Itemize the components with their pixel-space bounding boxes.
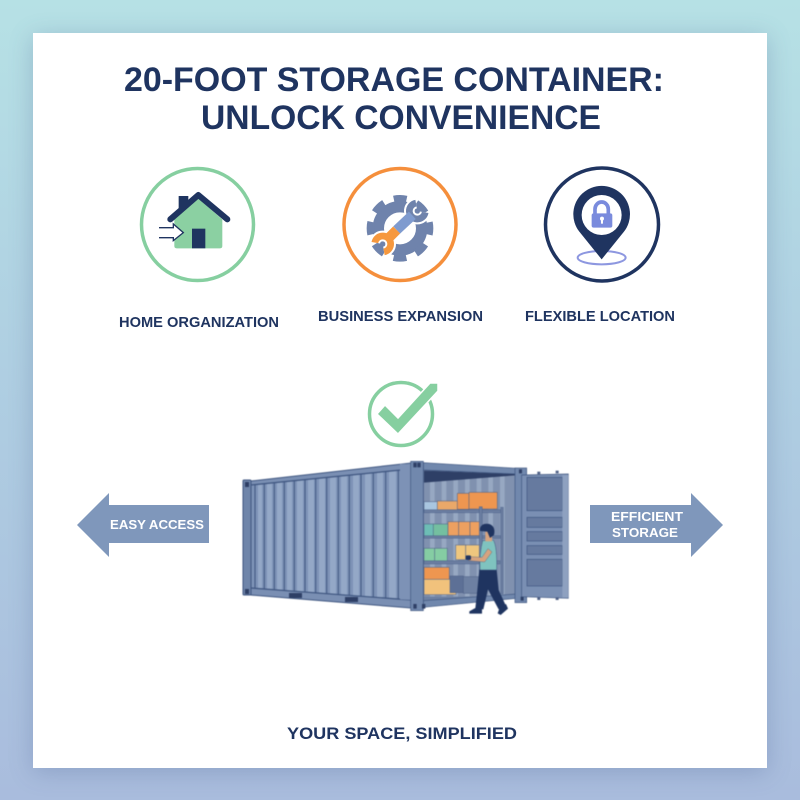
label: business expansion: BUSINESS EXPANSION: [318, 308, 483, 325]
panel: business expansion: [318, 168, 483, 325]
title: 20-FOOT STORAGE CONTAINER:: [124, 61, 664, 99]
illustration: shipping container: [243, 460, 568, 615]
icon: gear and wrench: [371, 199, 429, 258]
arrow: efficient storage: STORAGE: [612, 525, 678, 540]
container frame: [400, 461, 527, 611]
icon: house: [158, 195, 227, 248]
icon: location pin with lock: [573, 186, 630, 264]
arrow: efficient storage: EFFICIENT: [611, 509, 683, 524]
shelving rack: [424, 507, 503, 594]
arrow: easy access: [77, 493, 209, 557]
open door: [522, 471, 568, 600]
container side wall: [243, 460, 411, 610]
tagline: YOUR SPACE, SIMPLIFIED: [287, 724, 517, 743]
panel: home organization: [119, 168, 279, 331]
shelf boxes: [424, 492, 497, 595]
label: flexible location: FLEXIBLE LOCATION: [525, 308, 675, 325]
title: UNLOCK CONVENIENCE: [201, 99, 601, 137]
panel: flexible location: [525, 168, 675, 325]
arrow: efficient storage: [590, 493, 723, 557]
arrow: easy access: EASY ACCESS: [110, 517, 204, 532]
title: [124, 61, 664, 137]
label: home organization: HOME ORGANIZATION: [119, 314, 279, 331]
icon: check mark: [370, 382, 438, 446]
open end with shelves and worker: [400, 461, 568, 615]
worker: [466, 524, 508, 615]
